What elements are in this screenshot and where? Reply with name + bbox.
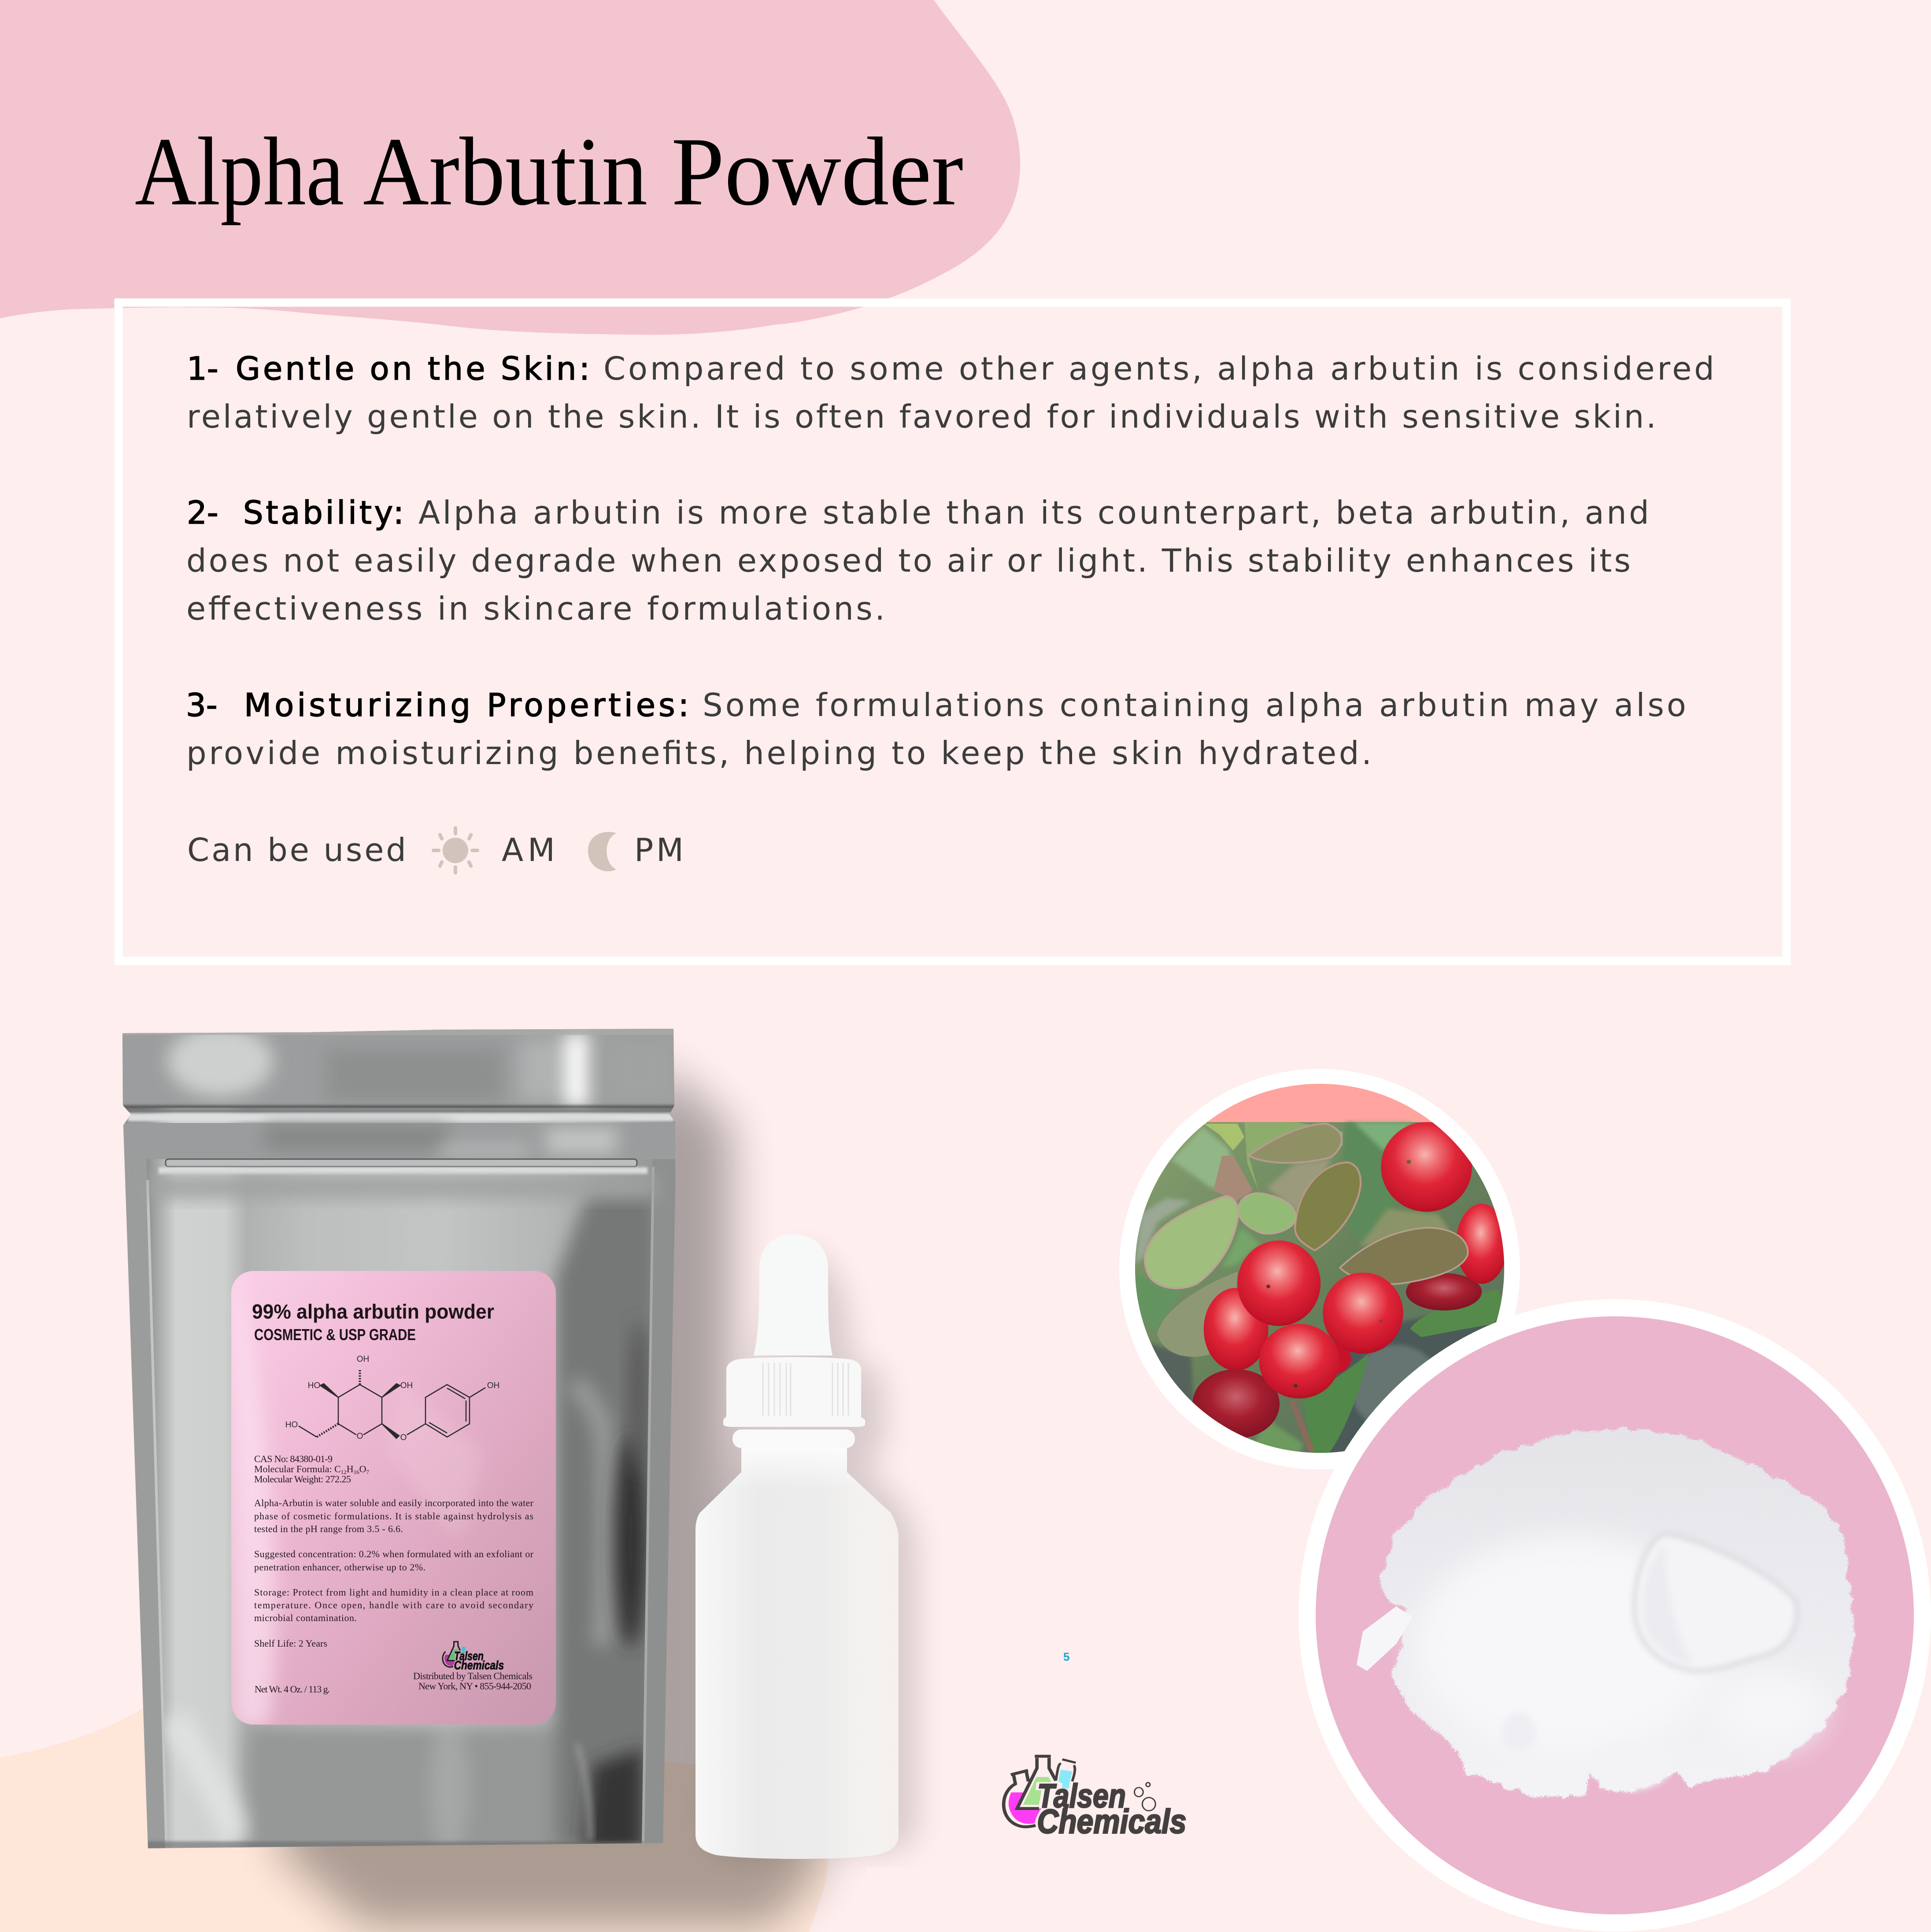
label logo: Chemicals [454,1659,504,1672]
label body text: Storage: Protect from light and humidity in a clean place at room [254,1587,533,1598]
label body text: Net Wt. 4 Oz. / 113 g. [255,1684,330,1695]
chemical structure: O [400,1433,407,1442]
chemical structure: HO [308,1381,320,1390]
usage line: AM and PM [187,826,684,875]
bottle neck ring [732,1430,855,1448]
pouch top seal band [119,1026,683,1108]
text block: stability: does not easily degrade when exposed to air or light. This stability enhances its [186,542,1631,579]
bubbles [1134,1783,1155,1811]
blurred background foliage [1129,1122,1523,1473]
label body text: O [359,1463,366,1474]
chemical structure: HO [285,1420,298,1430]
label body text: phase of cosmetic formulations. It is stable against hydrolysis as [254,1511,533,1522]
label body text: New York, NY • 855-944-2050 [418,1681,531,1692]
label body text: Molecular Weight: 272.25 [254,1474,351,1485]
text block: moisturizing properties: 3- [186,687,218,724]
usage line: AM and PM: Can be used [187,831,406,868]
photo: bearberry plant circle [1119,1069,1523,1473]
label logo: Talsen [454,1649,484,1662]
label heading [252,1300,494,1344]
text block: stability: effectiveness in skincare formulations. [186,590,885,627]
text block: moisturizing properties: Some formulations containing alpha arbutin may also [703,687,1686,724]
icon: moon [588,832,616,871]
text block: moisturizing properties [186,687,1686,772]
conical flask [1023,1777,1052,1805]
text block: gentle on the skin: relatively gentle on the skin. It is often favored for individuals with sensitive skin. [187,398,1656,435]
product: foil pouch [119,1026,683,1854]
text block: gentle on the skin: 1- [187,350,218,387]
title [135,118,963,226]
pouch zip groove [166,1159,637,1167]
label body text: H [347,1463,354,1474]
pouch label [231,1271,556,1726]
salmon header strip [1128,1075,1515,1122]
label body text: Suggested concentration: 0.2% when formulated with an exfoliant or [254,1548,534,1559]
label body text [254,1453,534,1695]
chemical structure: OH [400,1381,413,1390]
chemical structure [285,1355,499,1442]
label body text: Molecular Formula: C [254,1463,341,1474]
bottle body [695,1444,899,1859]
pouch drop shadow [273,1066,828,1927]
powder mound [1636,1536,1795,1669]
text block: gentle on the skin: Gentle on the Skin: [236,350,590,387]
label heading: COSMETIC & USP GRADE [254,1326,416,1344]
brand logo: Talsen Chemicals: Chemicals [1037,1803,1187,1840]
pouch zip seal [123,1105,678,1108]
round flask [1004,1770,1036,1827]
text block: moisturizing properties: provide moisturizing benefits, helping to keep the skin hydrated. [186,735,1372,772]
title: Arbutin [363,118,647,226]
icon: sun [432,826,479,875]
dropper cap collar [723,1357,865,1427]
label body text: CAS No: 84380-01-9 [254,1453,333,1464]
usage line: AM and PM: PM [634,831,684,868]
stray page number: 5 [1063,1650,1069,1663]
detached powder chunk [1357,1607,1413,1671]
brand logo: Talsen Chemicals [1004,1756,1187,1840]
label logo [443,1642,504,1672]
shadow cut-off [866,1867,1016,1932]
label body text: 16 [354,1469,359,1475]
label body text: Shelf Life: 2 Years [254,1638,327,1649]
text block: moisturizing properties: Moisturizing Properties: [244,687,689,724]
panel: benefits frame [118,303,1787,961]
chemical structure: OH [357,1355,369,1364]
chemical structure: O [357,1432,363,1441]
title: Powder [671,118,963,226]
title: Alpha [135,118,344,226]
text block: stability: Alpha arbutin is more stable than its counterpart, beta arbutin, and [418,494,1649,531]
decorative peach shape bottom left [0,1680,828,1932]
label heading: 99% alpha arbutin powder [252,1300,494,1323]
bottle drop shadow [714,1251,916,1852]
vial [1058,1769,1073,1789]
logo wordmark: Talsen [1037,1777,1126,1815]
chemical structure: OH [487,1381,499,1390]
label body text: Distributed by Talsen Chemicals [413,1670,533,1681]
label body text: 7 [366,1469,370,1475]
text block: gentle on the skin: Compared to some other agents, alpha arbutin is considered [603,350,1714,387]
powder pile [1357,1428,1855,1798]
label body text: microbial contamination. [254,1612,357,1623]
text block: stability: 2- [187,494,218,531]
text block: gentle on the skin [187,350,1714,435]
label body text: tested in the pH range from 3.5 - 6.6. [254,1523,403,1534]
text block: stability: Stability: [243,494,404,531]
dropper bulb [754,1234,832,1356]
usage line: AM and PM: AM [502,831,555,868]
label body text: Alpha-Arbutin is water soluble and easily incorporated into the water [254,1497,534,1508]
label body text: temperature. Once open, handle with care to avoid secondary [254,1600,533,1611]
pouch left edge strip [123,1123,166,1850]
decorative pink blob behind title [0,0,1020,335]
product: white dropper bottle [695,1234,899,1859]
photo: powder circle [1298,1299,1931,1932]
foil highlights [174,1189,656,1854]
label body text: 12 [341,1469,347,1475]
text block: stability [186,494,1649,627]
label body text: penetration enhancer, otherwise up to 2%. [254,1562,425,1573]
pouch right edge strip [644,1200,673,1843]
